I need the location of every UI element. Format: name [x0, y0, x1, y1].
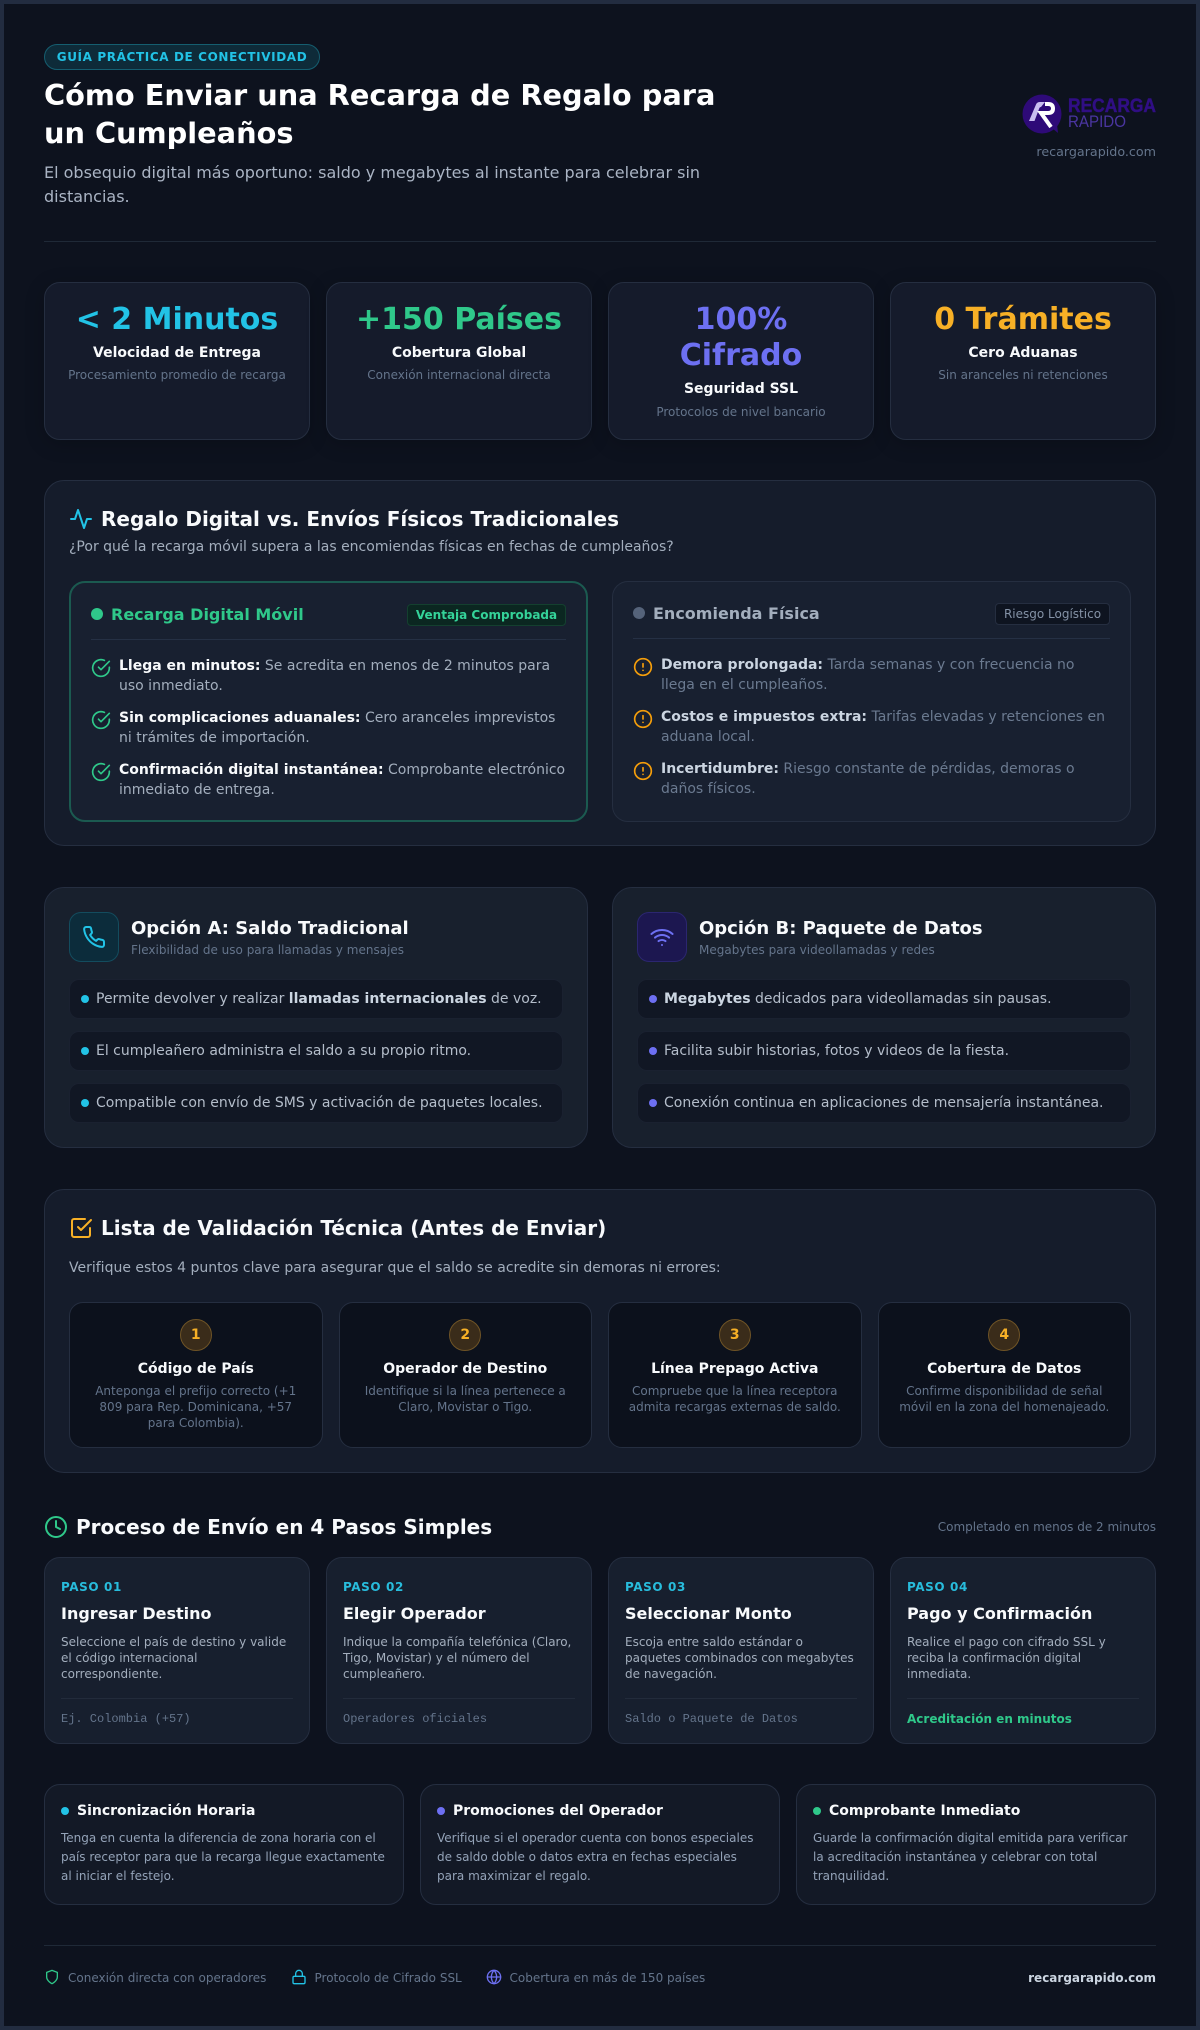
header — [44, 44, 1156, 242]
feature row — [637, 979, 1131, 1019]
stat: cifrado: Protocolos de nivel bancario — [656, 405, 826, 419]
tip 3: Comprobante Inmediato — [829, 1803, 1020, 1819]
icon: wifi — [637, 912, 687, 962]
step 3: Escoja entre saldo estándar o — [625, 1635, 803, 1649]
step 1: Ingresar Destino — [61, 1604, 212, 1623]
panel: validation — [44, 1189, 1156, 1473]
check 4 — [878, 1302, 1131, 1448]
tag — [407, 604, 566, 626]
stat: cifrado — [608, 282, 874, 440]
step 4: PASO 04 — [907, 1580, 968, 1594]
check 3: 3 — [730, 1327, 740, 1343]
item: llega en el cumpleaños. — [661, 677, 828, 693]
check 3: admita recargas externas de saldo. — [629, 1400, 841, 1414]
check 3: Compruebe que la línea receptora — [632, 1384, 838, 1398]
check 2: 2 — [460, 1327, 470, 1343]
step 4 — [890, 1557, 1156, 1744]
icon: globe — [486, 1970, 502, 1984]
option subtitle: Flexibilidad de uso para llamadas y mensajes — [131, 943, 404, 957]
footer — [44, 1945, 1156, 1995]
stat: cobertura — [326, 282, 592, 440]
stat: tramites: Sin aranceles ni retenciones — [938, 368, 1108, 382]
step 2: Tigo, Movistar) y el número del — [343, 1651, 530, 1665]
item — [634, 657, 1074, 693]
title: un Cumpleaños — [44, 116, 294, 150]
item: aduana local. — [661, 729, 755, 745]
stat: cobertura: +150 Países — [356, 302, 562, 337]
step 3: Saldo o Paquete de Datos — [625, 1712, 798, 1726]
validation heading: Lista de Validación Técnica (Antes de Enviar) — [101, 1216, 606, 1240]
tip 1: Tenga en cuenta la diferencia de zona horaria con el — [61, 1830, 376, 1844]
card heading: Encomienda Física — [653, 604, 820, 623]
check 3 — [608, 1302, 862, 1448]
icon: clock — [45, 1516, 67, 1538]
check 3: Línea Prepago Activa — [651, 1361, 818, 1377]
step 2: cumpleañero. — [343, 1667, 425, 1681]
tag: Riesgo Logístico — [1004, 607, 1101, 621]
step 2 — [326, 1557, 592, 1744]
stat: velocidad: < 2 Minutos — [76, 302, 278, 337]
stat: cifrado: Seguridad SSL — [684, 381, 798, 397]
stat: tramites: 0 Trámites — [934, 302, 1112, 337]
check 1: 1 — [191, 1327, 201, 1343]
item: inmediato de entrega. — [119, 782, 275, 798]
check 1: Código de País — [138, 1361, 254, 1377]
step 2: Indique la compañía telefónica (Claro, — [343, 1635, 571, 1649]
footer text: ssl: Protocolo de Cifrado SSL — [314, 1971, 462, 1985]
stat: velocidad — [44, 282, 310, 440]
tip 3: la acreditación instantánea y celebrar con total — [813, 1850, 1097, 1864]
step 1: el código internacional — [61, 1651, 197, 1665]
item — [92, 762, 565, 798]
tip 3: Guarde la confirmación digital emitida para verificar — [813, 1830, 1127, 1844]
panel: opcion A — [44, 887, 588, 1148]
feature row: Permite devolver y realizar llamadas internacionales de voz. — [96, 991, 542, 1007]
list — [634, 657, 1105, 797]
tip 2: de saldo doble o datos extra en fechas especiales — [437, 1850, 737, 1864]
item: Costos e impuestos extra: Tarifas elevadas y retenciones en — [661, 709, 1105, 725]
header divider line — [44, 241, 1156, 242]
item: ni trámites de importación. — [119, 730, 310, 746]
step 2: PASO 02 — [343, 1580, 404, 1594]
check 2: Claro, Movistar o Tigo. — [398, 1400, 532, 1414]
feature row: Megabytes dedicados para videollamadas sin pausas. — [664, 991, 1052, 1007]
step 3 — [608, 1557, 874, 1744]
feature row — [637, 1031, 1131, 1071]
step 3: de navegación. — [625, 1667, 717, 1681]
icon: shield — [46, 1970, 58, 1984]
subtitle — [44, 163, 700, 206]
validation intro: Verifique estos 4 puntos clave para asegurar que el saldo se acredite sin demoras ni errores: — [69, 1260, 721, 1276]
tip 1: Sincronización Horaria — [77, 1803, 255, 1819]
step 1 — [44, 1557, 310, 1744]
check 1: Anteponga el prefijo correcto (+1 — [95, 1384, 296, 1398]
feature row: El cumpleañero administra el saldo a su propio ritmo. — [96, 1043, 471, 1059]
subtitle: distancias. — [44, 187, 130, 206]
tag — [995, 603, 1110, 625]
feature row — [69, 1031, 563, 1071]
tip 1: país receptor para que la recarga llegue exactamente — [61, 1850, 385, 1864]
icon: check square — [71, 1218, 92, 1238]
footer site: recargarapido.com — [1028, 1971, 1156, 1985]
process note: Completado en menos de 2 minutos — [938, 1520, 1156, 1534]
tip 3 — [796, 1784, 1156, 1905]
item — [634, 761, 1075, 797]
option heading: Opción A: Saldo Tradicional — [131, 918, 409, 939]
icon: phone — [69, 912, 119, 962]
tip 2 — [420, 1784, 780, 1905]
check 2: Identifique si la línea pertenece a — [365, 1384, 566, 1398]
panel: comparison — [44, 480, 1156, 846]
item: daños físicos. — [661, 781, 756, 797]
feature row: Compatible con envío de SMS y activación de paquetes locales. — [96, 1095, 543, 1111]
stat: velocidad: Procesamiento promedio de recarga — [68, 368, 286, 382]
badge: GUÍA PRÁCTICA DE CONECTIVIDAD — [57, 50, 307, 64]
step 2: Elegir Operador — [343, 1604, 486, 1623]
status dot — [633, 607, 645, 619]
subtitle: El obsequio digital más oportuno: saldo y megabytes al instante para celebrar sin — [44, 163, 700, 182]
check 4: Cobertura de Datos — [927, 1361, 1081, 1377]
tip 3: tranquilidad. — [813, 1869, 889, 1883]
stat: tramites: Cero Aduanas — [968, 345, 1078, 361]
step 4: Realice el pago con cifrado SSL y — [907, 1635, 1106, 1649]
check 4: 4 — [999, 1327, 1009, 1343]
step 3: Seleccionar Monto — [625, 1604, 792, 1623]
card heading: Recarga Digital Móvil — [111, 605, 304, 624]
card: recarga digital — [69, 581, 588, 822]
feature row — [69, 1083, 563, 1123]
item — [92, 710, 555, 746]
feature row: Facilita subir historias, fotos y videos de la fiesta. — [664, 1043, 1009, 1059]
check 4: móvil en la zona del homenajeado. — [899, 1400, 1109, 1414]
site url: recargarapido.com — [1036, 144, 1156, 158]
tip 2: Verifique si el operador cuenta con bonos especiales — [437, 1830, 753, 1844]
item — [92, 658, 550, 694]
step 1: PASO 01 — [61, 1580, 122, 1594]
check 1 — [69, 1302, 322, 1448]
panel: opcion B — [612, 887, 1156, 1148]
icon: lock — [292, 1970, 306, 1984]
badge — [44, 44, 320, 70]
check 1: para Colombia). — [148, 1416, 244, 1430]
step 4: Pago y Confirmación — [907, 1604, 1092, 1623]
icon: activity pulse — [70, 509, 92, 529]
step 1: Seleccione el país de destino y valide — [61, 1635, 286, 1649]
step 3: paquetes combinados con megabytes — [625, 1651, 854, 1665]
step 4: Acreditación en minutos — [907, 1712, 1072, 1726]
feature row — [637, 1083, 1131, 1123]
step 1: Ej. Colombia (+57) — [61, 1712, 191, 1726]
title: Cómo Enviar una Recarga de Regalo para — [44, 78, 715, 112]
item: Demora prolongada: Tarda semanas y con frecuencia no — [661, 657, 1074, 673]
tip 2: Promociones del Operador — [453, 1803, 663, 1819]
item: Incertidumbre: Riesgo constante de pérdidas, demoras o — [661, 761, 1075, 777]
footer text: cobertura: Cobertura en más de 150 países — [510, 1971, 705, 1985]
stat: cobertura: Cobertura Global — [392, 345, 526, 361]
footer text: conexion: Conexión directa con operadores — [68, 1971, 266, 1985]
item: Llega en minutos: Se acredita en menos de 2 minutos para — [119, 658, 550, 674]
step 2: Operadores oficiales — [343, 1712, 487, 1726]
status dot — [91, 608, 103, 620]
step 4: inmediata. — [907, 1667, 971, 1681]
check 1: 809 para Rep. Dominicana, +57 — [99, 1400, 292, 1414]
option heading: Opción B: Paquete de Datos — [699, 918, 983, 939]
feature row: Conexión continua en aplicaciones de mensajería instantánea. — [664, 1095, 1103, 1111]
stat: cobertura: Conexión internacional directa — [367, 368, 551, 382]
check 4: Confirme disponibilidad de señal — [906, 1384, 1102, 1398]
card: encomienda fisica — [612, 581, 1131, 822]
stat: tramites — [890, 282, 1156, 440]
comparison heading: Regalo Digital vs. Envíos Físicos Tradicionales — [101, 507, 619, 531]
step 4: reciba la confirmación digital — [907, 1651, 1081, 1665]
tip 2: para maximizar el regalo. — [437, 1869, 591, 1883]
option subtitle: Megabytes para videollamadas y redes — [699, 943, 935, 957]
check 2: Operador de Destino — [383, 1361, 547, 1377]
process heading: Proceso de Envío en 4 Pasos Simples — [76, 1515, 492, 1539]
title — [44, 78, 715, 150]
comparison subtitle: ¿Por qué la recarga móvil supera a las encomiendas físicas en fechas de cumpleaños? — [69, 539, 674, 555]
item — [634, 709, 1105, 745]
check 2 — [338, 1302, 592, 1448]
logo — [1022, 94, 1156, 134]
item: Sin complicaciones aduanales: Cero aranceles imprevistos — [119, 710, 555, 726]
logo: RAPIDO — [1068, 113, 1126, 131]
step 1: correspondiente. — [61, 1667, 162, 1681]
stat: cifrado: 100% — [695, 302, 787, 337]
tip 1 — [44, 1784, 404, 1905]
item: Confirmación digital instantánea: Comprobante electrónico — [119, 762, 565, 778]
tip 1: al iniciar el festejo. — [61, 1869, 175, 1883]
stat: velocidad: Velocidad de Entrega — [93, 345, 261, 361]
item: uso inmediato. — [119, 678, 223, 694]
tag: Ventaja Comprobada — [416, 608, 557, 622]
step 3: PASO 03 — [625, 1580, 686, 1594]
stat: cifrado: Cifrado — [680, 338, 802, 373]
list — [92, 658, 565, 798]
feature row — [69, 979, 563, 1019]
